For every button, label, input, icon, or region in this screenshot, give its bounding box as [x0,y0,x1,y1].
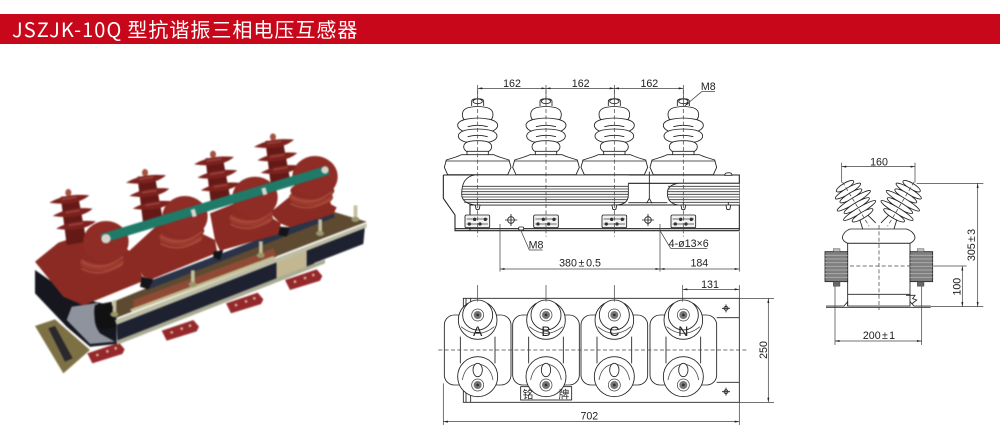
dimension: 162 spacing: 162 [640,78,658,90]
insulators [49,133,301,245]
callout: bottom M8 [519,227,543,252]
dimension: 305 [917,183,983,307]
nameplate text [523,388,570,401]
phase labels: B [541,323,551,339]
nameplate panel [521,387,572,400]
dimension: 162 spacing [478,78,683,105]
front potted bushings [80,156,338,277]
terminal plates [465,215,696,228]
dimension: 160 [842,157,915,182]
product photo [35,133,367,373]
callout: top M8 [685,81,716,106]
dimension: 162 spacing: 162 [572,78,590,90]
insulators [444,99,717,175]
red feet [87,269,322,363]
dimension: 160: 160 [870,157,888,169]
bolts [110,205,359,317]
phase labels: A [473,323,483,339]
mounting bracket [35,319,90,373]
green busbar [101,166,329,243]
title: JSZJK-10Q型抗谐振三相电压互感器 [12,14,358,43]
right coil [910,249,933,286]
front view drawing [443,78,739,272]
dimension: 702 [443,383,739,425]
dimension: 250: 250 [758,341,770,359]
side view drawing [825,157,983,345]
transformer body [443,172,739,231]
phase bushings [444,300,717,397]
dimension: 702: 702 [580,411,598,423]
dimension: 131: 131 [701,279,719,291]
dimension: 305: 305±3 [966,229,978,261]
dimension: 100 [933,266,967,307]
base plate [463,298,739,402]
mounting holes [722,304,730,396]
phase labels: C [609,323,619,339]
nameplate text: 牌 [559,388,570,401]
dimension: 100: 100 [952,278,964,296]
dimension: 380 and 184: 184 [690,258,708,270]
dimension: 380 and 184: 380±0.5 [559,258,601,270]
callout: top M8: M8 [701,81,716,93]
red insulation housings [35,188,337,305]
dimension: 200 [835,287,922,345]
callout: bottom M8: M8 [529,240,543,252]
housing [826,225,931,310]
tilted insulators [826,172,931,237]
dimension: 380 and 184 [500,224,739,272]
title bar background [0,14,1000,44]
callout: holes [660,231,709,250]
phase labels: N [678,323,688,339]
phase labels [473,323,688,339]
mounting holes [505,214,654,226]
core body [35,211,367,347]
left coil [825,249,848,286]
callout: holes: 4-ø13×6 [669,238,709,250]
dimension: 131 [683,279,739,302]
nameplate text: 铭 [523,388,533,401]
dimension: 200: 200±1 [863,330,895,342]
plan view drawing [438,279,774,425]
dimension: 250 [739,298,774,402]
dimension: 162 spacing: 162 [503,78,521,90]
